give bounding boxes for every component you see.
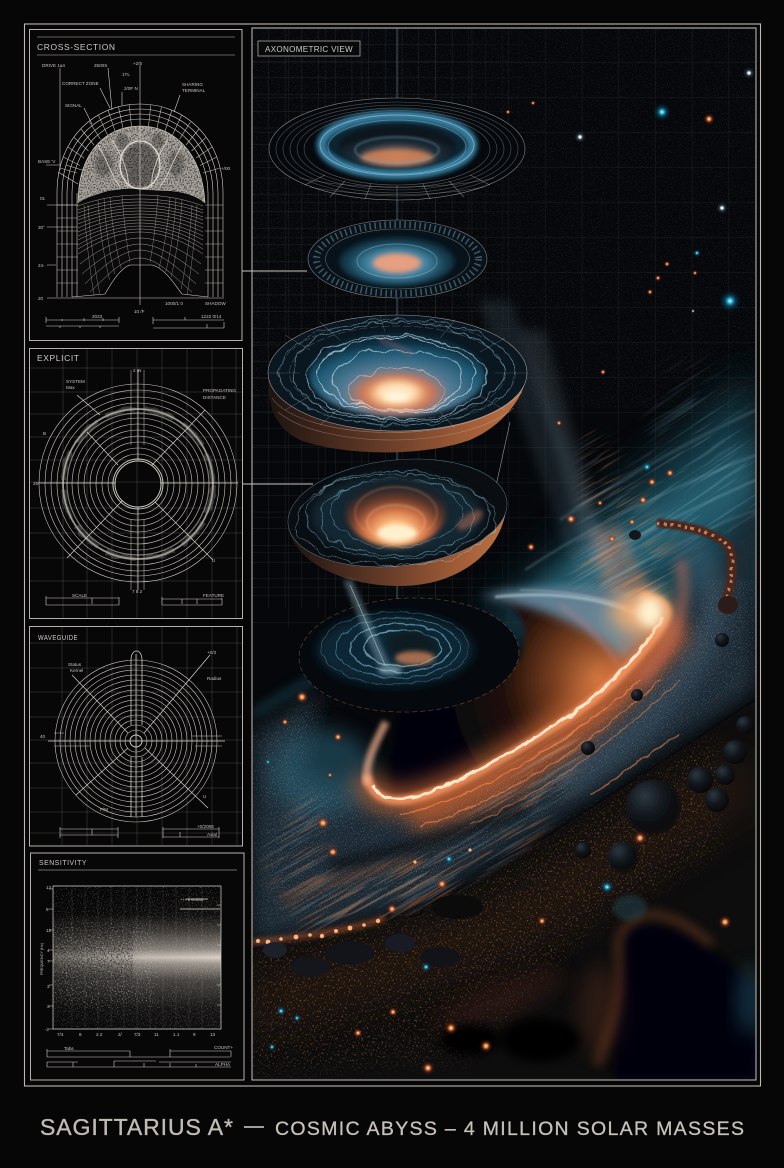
callout labels: U bbox=[203, 794, 206, 799]
callout labels: Max bbox=[66, 385, 75, 390]
ember beads bbox=[256, 848, 472, 944]
callout labels: SYSTEM bbox=[66, 379, 85, 384]
callout labels: 40 bbox=[40, 734, 46, 739]
disk 5: jet bbox=[343, 580, 390, 665]
radial spokes bbox=[48, 654, 225, 817]
callout labels: Kernel bbox=[70, 668, 83, 673]
callout labels: 1TL bbox=[122, 72, 130, 77]
axis labels: 4 bbox=[47, 948, 50, 953]
callout labels: +0/3 bbox=[207, 650, 217, 655]
panel: main illustration bbox=[252, 28, 756, 1080]
callout labels: +/00 bbox=[221, 166, 231, 171]
heading: sensitivity: SENSITIVITY bbox=[39, 858, 87, 867]
upper blue sweep bbox=[480, 587, 668, 672]
scatter plot bbox=[49, 886, 221, 1029]
scatter plot: +++ 8 SIGMA bbox=[180, 898, 204, 902]
scale bars bbox=[46, 593, 224, 605]
callout labels: 2 IN bbox=[133, 368, 141, 373]
blueprint grid bbox=[252, 28, 756, 628]
connector: exploded view to disk 4 bbox=[237, 483, 313, 485]
axis labels: 13 bbox=[210, 1032, 216, 1037]
axis labels: 3 bbox=[47, 984, 50, 989]
disk 1: outer wireframe bbox=[269, 98, 525, 200]
concentric ring diagram bbox=[48, 651, 225, 822]
panel: exploded view bbox=[30, 348, 242, 618]
axis labels: 7/3 bbox=[134, 1032, 141, 1037]
callout labels: DISTANCE bbox=[203, 395, 226, 400]
disk 5: spiral bbox=[321, 612, 469, 684]
callout labels: SHADOW bbox=[205, 301, 226, 306]
callout labels: DRIVE 1a4 bbox=[42, 63, 65, 68]
disk 4: funnel bbox=[346, 477, 446, 547]
scale bars bbox=[46, 314, 224, 328]
heading: waveguide: WAVEGUIDE bbox=[38, 633, 78, 642]
scale bars: SCALE bbox=[72, 593, 87, 598]
blurred foreground rock bbox=[429, 895, 762, 1080]
heading: exploded view: EXPLICIT bbox=[37, 353, 80, 363]
callout labels: Status bbox=[68, 662, 82, 667]
panel: waveguide bbox=[30, 626, 242, 846]
scale bars: 1222 0/14 bbox=[201, 314, 222, 319]
bottom title: COSMIC ABYSS – 4 MILLION SOLAR MASSES bbox=[275, 1118, 744, 1140]
axis labels: 8 bbox=[79, 1032, 82, 1037]
grid bbox=[30, 349, 242, 618]
galaxy outer disc bbox=[252, 428, 756, 948]
scale bars: Axial bbox=[207, 832, 217, 837]
callout labels: 25 bbox=[33, 481, 39, 486]
rock chain upper right bbox=[629, 523, 738, 614]
illustration title box bbox=[258, 41, 360, 56]
teal nebula band bbox=[476, 358, 756, 659]
heading: cross-section: CROSS-SECTION bbox=[37, 42, 116, 52]
disk 4: top face bbox=[288, 459, 507, 567]
disk 2: funnel bbox=[339, 236, 455, 286]
rocky lumps midground bbox=[263, 633, 754, 977]
axis labels: 9 bbox=[46, 907, 49, 912]
scale bars: COUNT+ bbox=[214, 1045, 233, 1050]
disk 4: copper rim bbox=[288, 501, 507, 586]
callout labels: BASE 'V bbox=[38, 159, 56, 164]
dome lower hatch bbox=[72, 190, 208, 297]
axis labels: 2.2 bbox=[96, 1032, 103, 1037]
callout labels: TERMINAL bbox=[182, 88, 206, 93]
axis labels: FREQUENCY (Hz) bbox=[40, 942, 44, 975]
disk 1: center bbox=[339, 126, 455, 168]
axis labels: -2 bbox=[45, 1027, 50, 1032]
axis labels: 7/4 bbox=[57, 1032, 64, 1037]
dark interior of accretion sweep bbox=[394, 588, 634, 794]
axis labels: 1.1 bbox=[173, 1032, 180, 1037]
disk 3: copper rim bbox=[268, 373, 527, 452]
heading: cross-section bbox=[37, 37, 235, 55]
axis labels: 11 bbox=[154, 1032, 159, 1037]
title dash bbox=[244, 1126, 264, 1128]
disk 2 bbox=[308, 220, 487, 298]
scale bars: 2023 bbox=[92, 314, 103, 319]
axis labels: 13 bbox=[46, 885, 52, 890]
scale bars bbox=[60, 824, 219, 838]
axis labels: 7 bbox=[47, 959, 50, 964]
callout labels: 20 bbox=[38, 296, 44, 301]
grid bbox=[30, 627, 242, 846]
disk 3: top face bbox=[268, 315, 527, 431]
illustration title box: AXONOMETRIC VIEW bbox=[265, 45, 353, 54]
connector: cross-section to disk 2 bbox=[223, 270, 307, 272]
callout labels: 01 bbox=[40, 196, 46, 201]
disk 5 bbox=[297, 580, 521, 716]
disk 3: filaments bbox=[279, 319, 515, 425]
scattered stars bbox=[265, 67, 755, 1075]
light rays from disks bbox=[478, 300, 660, 610]
lower debris field bbox=[252, 700, 756, 1080]
axis labels: 3 bbox=[47, 1004, 50, 1009]
bottom title bbox=[40, 1114, 744, 1140]
callout labels bbox=[33, 368, 236, 594]
axis labels: 2/ bbox=[118, 1032, 123, 1037]
axis beam bbox=[396, 28, 398, 620]
callout labels: SIGNAL bbox=[65, 103, 82, 108]
scale bars: Tabs bbox=[64, 1046, 74, 1051]
radial spokes bbox=[38, 370, 238, 590]
deep space base bbox=[252, 28, 756, 1080]
callout labels: 10 /F bbox=[134, 309, 145, 314]
callout leaders bbox=[58, 68, 180, 184]
callout labels bbox=[38, 61, 231, 314]
base line and axis bbox=[46, 65, 224, 305]
panel: cross-section bbox=[30, 30, 242, 340]
scale bars: ALPHA bbox=[215, 1062, 231, 1067]
callout labels: PROPAGATING bbox=[203, 388, 236, 393]
axis labels bbox=[40, 885, 216, 1037]
axis labels: 9 bbox=[193, 1032, 196, 1037]
panel frame: illustration bbox=[252, 28, 756, 1080]
callout labels: 30° bbox=[38, 225, 45, 230]
callout labels: 2500S bbox=[94, 63, 107, 68]
callout labels: 1000/1 0 bbox=[165, 301, 183, 306]
callout labels: SHARING bbox=[182, 82, 203, 87]
callout labels: CORRECT ZONE bbox=[62, 81, 99, 86]
dome interior mass bbox=[75, 124, 207, 206]
callout labels: F/M bbox=[100, 807, 108, 812]
disk 3 bbox=[268, 315, 527, 452]
callout labels: 2/0F N bbox=[124, 86, 138, 91]
callout labels: U bbox=[212, 558, 215, 563]
disk 3: core bbox=[375, 383, 419, 403]
disk 1: blue ring bbox=[321, 115, 473, 175]
dome shell arcs bbox=[57, 104, 223, 297]
callout labels: +2/5 bbox=[133, 61, 143, 66]
axis labels: 12 bbox=[46, 928, 52, 933]
bottom title: SAGITTARIUS A* bbox=[40, 1114, 233, 1140]
support line between disks bbox=[496, 422, 510, 486]
disk 4 bbox=[288, 458, 508, 586]
scale bars bbox=[47, 1045, 233, 1067]
callout labels: Radius bbox=[207, 676, 222, 681]
background faint stars bbox=[252, 28, 756, 408]
scale bars: +0/2008 bbox=[197, 824, 214, 829]
concentric disc diagram bbox=[38, 370, 238, 590]
panel: sensitivity bbox=[30, 853, 244, 1080]
callout labels: B bbox=[43, 431, 46, 436]
callout labels bbox=[40, 650, 222, 812]
scale bars: FEATURE bbox=[203, 593, 224, 598]
callout labels: 24- bbox=[38, 263, 45, 268]
callout labels: 7 8 2 bbox=[132, 589, 143, 594]
accretion arc glow bbox=[365, 560, 684, 826]
